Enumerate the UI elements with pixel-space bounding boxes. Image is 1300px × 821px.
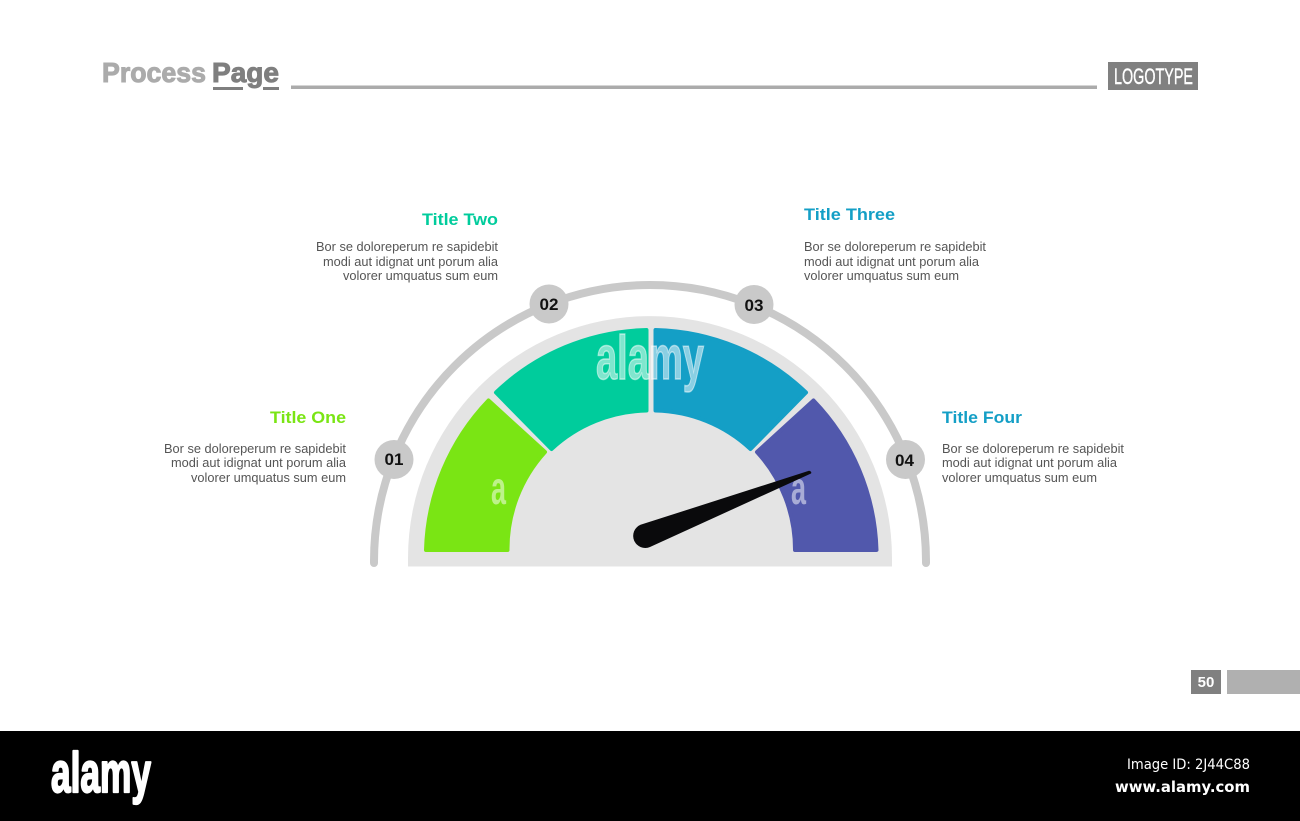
node 04: [886, 440, 925, 479]
text block: Title Three: [804, 205, 986, 283]
outer arc track: [374, 285, 926, 563]
needle: [633, 471, 811, 548]
text block: Title Two: modi aut idignat unt porum alia: [323, 254, 499, 269]
text block: Title Two: Title Two: [422, 210, 498, 229]
text block: Title One: [164, 408, 347, 485]
node 01: [374, 440, 414, 479]
text block: Title One: Bor se doloreperum re sapidebit: [164, 441, 346, 456]
text block: Title One: Title One: [270, 408, 346, 427]
header: [102, 57, 1198, 90]
text block: Title One: volorer umquatus sum eum: [191, 470, 346, 485]
segment 2: teal: [496, 330, 646, 449]
text block: Title Two: volorer umquatus sum eum: [343, 268, 498, 283]
page number: [1191, 670, 1300, 694]
watermark marks: alamy: [596, 324, 704, 393]
text block: Title Two: [316, 210, 499, 283]
header rule: [291, 86, 1097, 89]
text block: Title Four: Title Four: [942, 408, 1022, 427]
text block: Title Four: [942, 408, 1124, 485]
node 04: 04: [895, 451, 914, 470]
text block: Title Three: Bor se doloreperum re sapidebit: [804, 239, 986, 254]
text block: Title Two: Bor se doloreperum re sapidebit: [316, 239, 498, 254]
node 03: [734, 285, 774, 324]
footer band: [0, 731, 1300, 821]
node 02: 02: [540, 295, 558, 314]
watermark marks: a: [491, 462, 506, 514]
node 02: [530, 284, 568, 324]
gauge: [374, 284, 926, 566]
node 03: 03: [745, 296, 763, 315]
page number: 50: [1198, 674, 1214, 691]
text block: Title Four: modi aut idignat unt porum alia: [942, 455, 1118, 470]
text block: Title Three: volorer umquatus sum eum: [804, 268, 959, 283]
segment 3: blue: [656, 330, 806, 449]
text block: Title Four: Bor se doloreperum re sapidebit: [942, 441, 1124, 456]
text block: Title One: modi aut idignat unt porum alia: [171, 455, 347, 470]
image id: Image ID: 2J44C88: [1127, 757, 1250, 773]
footer logo: alamy: [51, 741, 151, 805]
watermark marks: a: [791, 462, 806, 514]
node 01: 01: [385, 450, 403, 469]
segment 4: purple: [757, 400, 876, 550]
logotype badge: [1108, 62, 1198, 90]
title: Process Page: Process: [102, 57, 206, 88]
title: Process Page: [102, 57, 279, 90]
gauge background half disc: [408, 316, 892, 566]
text block: Title Four: volorer umquatus sum eum: [942, 470, 1097, 485]
text block: Title Three: modi aut idignat unt porum alia: [804, 254, 980, 269]
logotype badge: LOGOTYPE: [1114, 64, 1193, 89]
watermark marks: [491, 324, 806, 514]
segment 1: green: [426, 400, 545, 550]
text block: Title Three: Title Three: [804, 205, 895, 224]
website: www.alamy.com: [1115, 778, 1250, 796]
title: Process Page: Page: [212, 57, 279, 88]
